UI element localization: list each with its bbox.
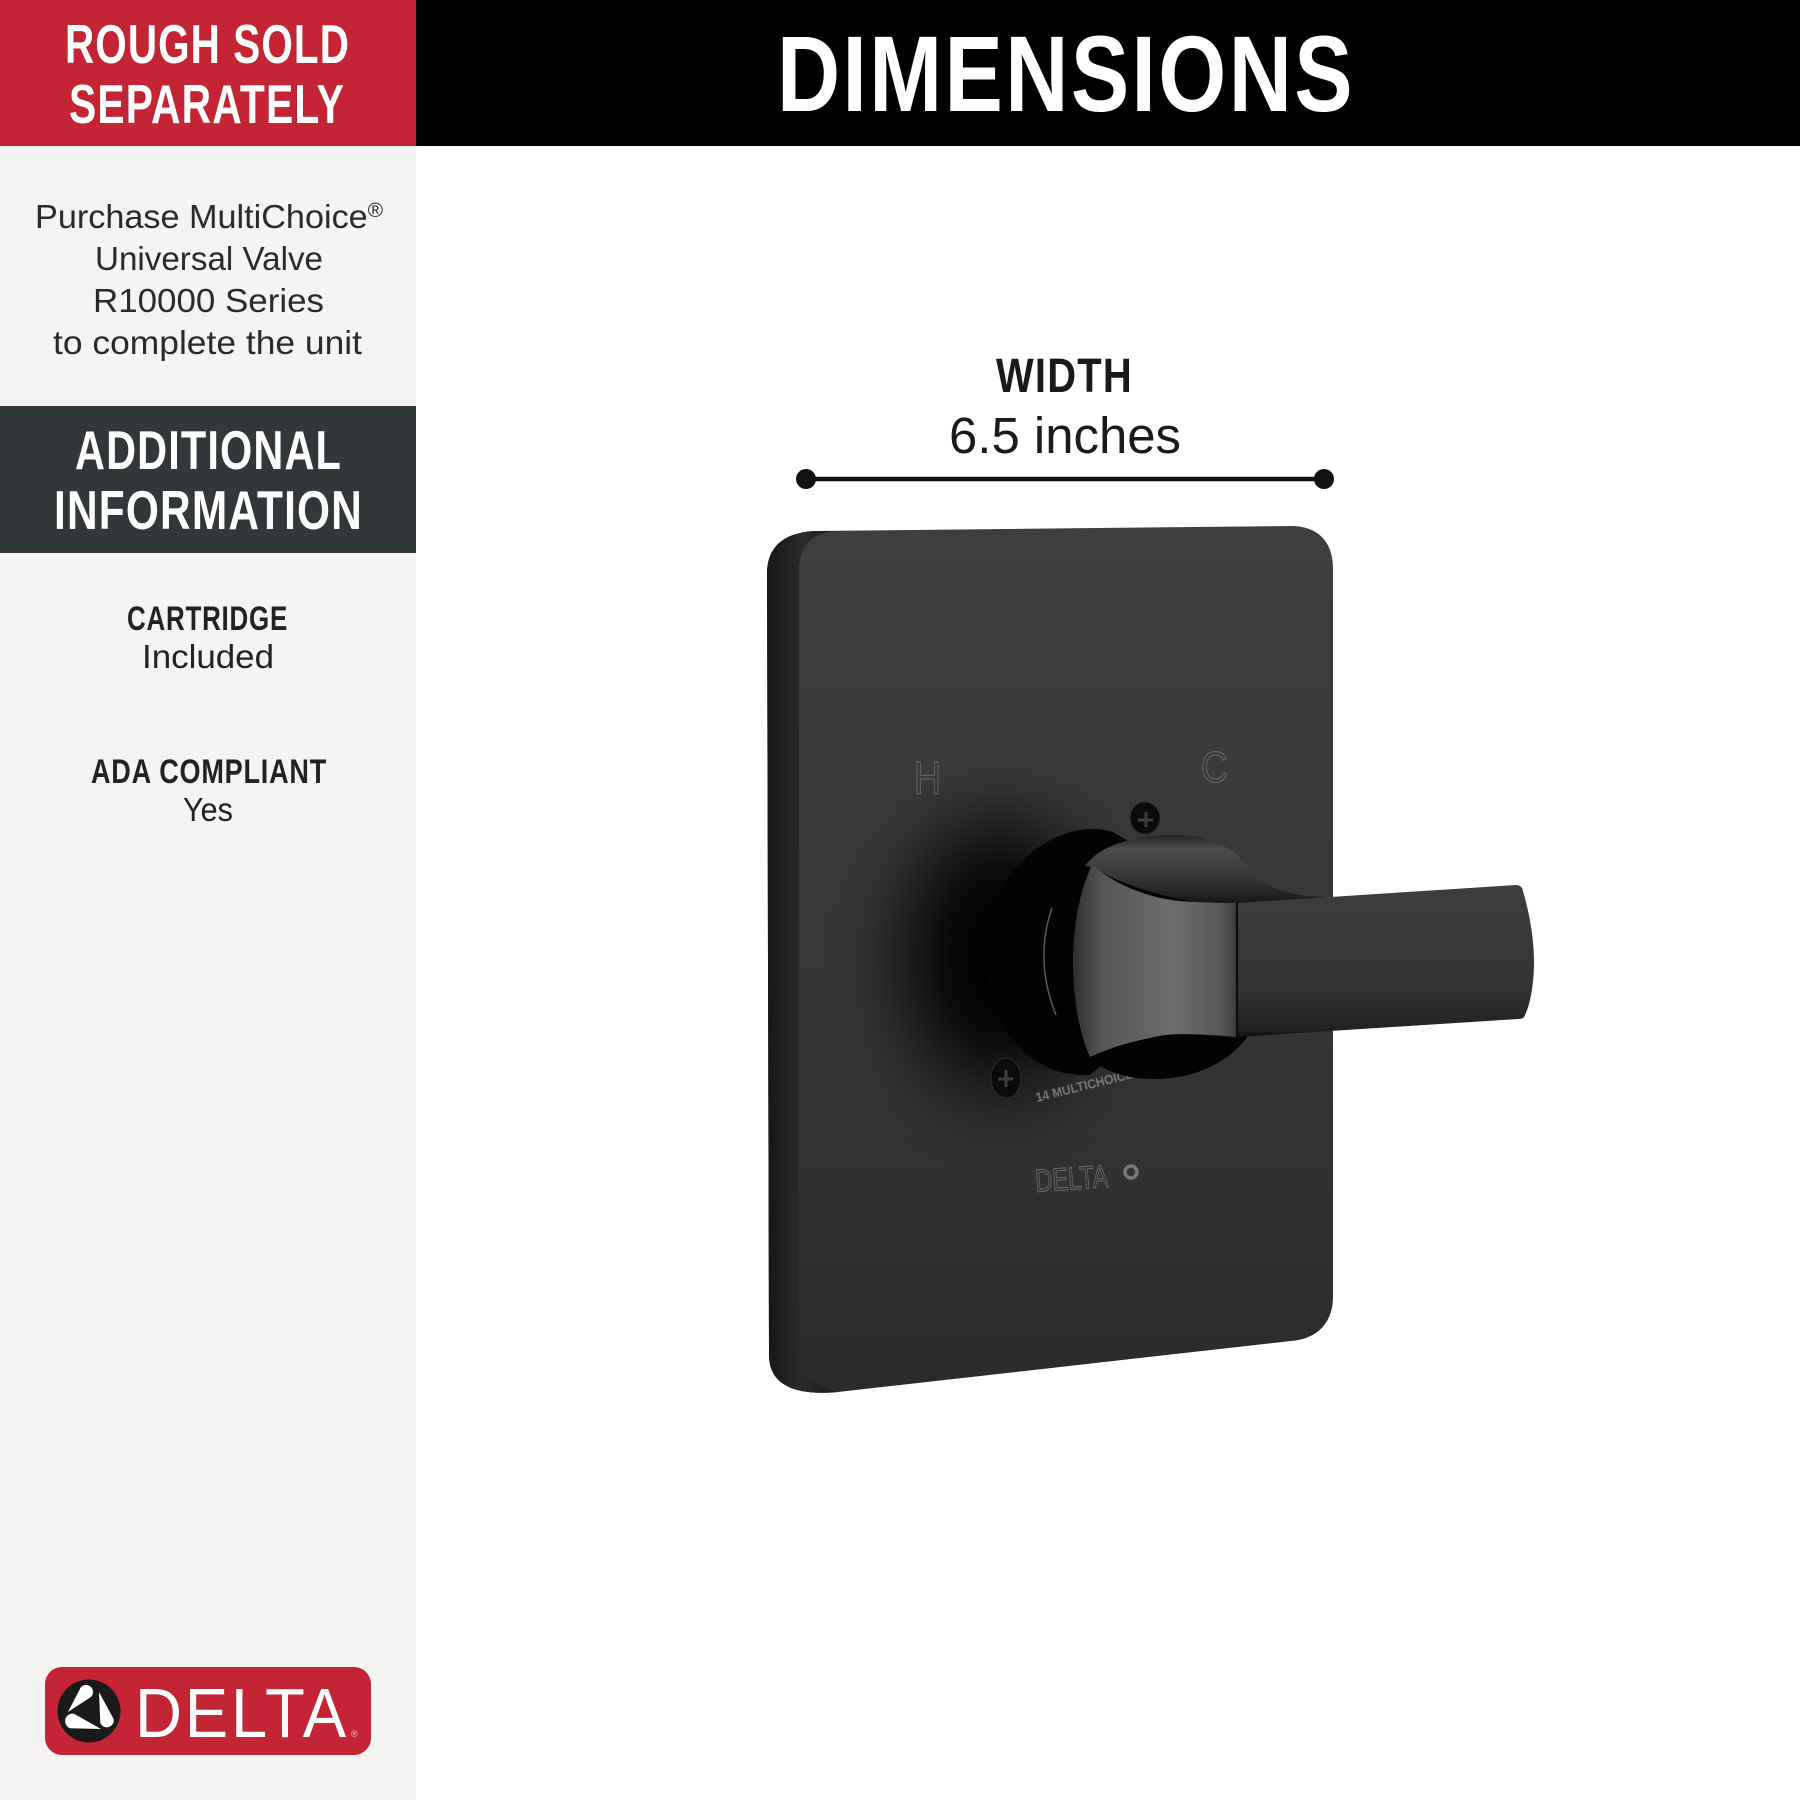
width label: 6.5 inches: [949, 407, 1181, 464]
banner heading: [65, 13, 350, 135]
text block: purchase note: R10000 Series: [93, 282, 324, 319]
title: DIMENSIONS: [777, 13, 1355, 134]
banner heading: [54, 419, 363, 541]
engraved delta mark: DELTA: [1034, 1158, 1110, 1199]
additional information banner: [0, 406, 416, 553]
knob face: [1073, 865, 1237, 1057]
registered mark: ®: [351, 1729, 358, 1739]
width label: WIDTH: [996, 350, 1133, 403]
logo wordmark: DELTA: [135, 1674, 349, 1752]
lever seam: [1236, 903, 1238, 1037]
header bar: dimensions: [416, 0, 1800, 146]
banner heading: SEPARATELY: [69, 73, 345, 135]
sidebar panel: [0, 146, 416, 1800]
banner heading: ADDITIONAL: [75, 419, 342, 481]
plate: [767, 526, 1333, 1393]
spec: cartridge: Included: [142, 638, 274, 675]
bottom screw: [991, 1058, 1021, 1098]
top screw: [1130, 802, 1160, 834]
knob upper dome: [1085, 835, 1331, 905]
text block: purchase note: Purchase MultiChoice: [35, 198, 356, 235]
text block: purchase note: ®: [368, 200, 383, 222]
spec: cartridge: [127, 600, 288, 675]
logo: delta: [45, 1667, 371, 1755]
banner heading: ROUGH SOLD: [65, 13, 350, 75]
text block: purchase note: Universal Valve: [95, 240, 323, 277]
red banner: rough sold separately: [0, 0, 416, 146]
spec: ada compliant: ADA COMPLIANT: [91, 753, 327, 791]
width dimension line: [796, 469, 1334, 489]
spec: ada compliant: Yes: [183, 791, 233, 828]
banner heading: INFORMATION: [54, 479, 363, 541]
text block: purchase note: to complete the unit: [53, 324, 362, 361]
spec: cartridge: CARTRIDGE: [127, 600, 288, 638]
width label: [949, 350, 1181, 464]
engraved C: C: [1201, 743, 1228, 792]
lever handle: [1237, 885, 1534, 1037]
text block: purchase note: [35, 198, 383, 361]
icon: delta triangle mark: [58, 1680, 120, 1742]
escutcheon: [985, 829, 1180, 1075]
spec: ada compliant: [91, 753, 327, 828]
knob body: [1040, 835, 1300, 1079]
engraved multichoice text: 14 MULTICHOICE: [1034, 1066, 1135, 1105]
gleam: [1044, 908, 1056, 1015]
engraved H: H: [914, 752, 941, 804]
product: shower trim plate with lever: [767, 526, 1534, 1393]
